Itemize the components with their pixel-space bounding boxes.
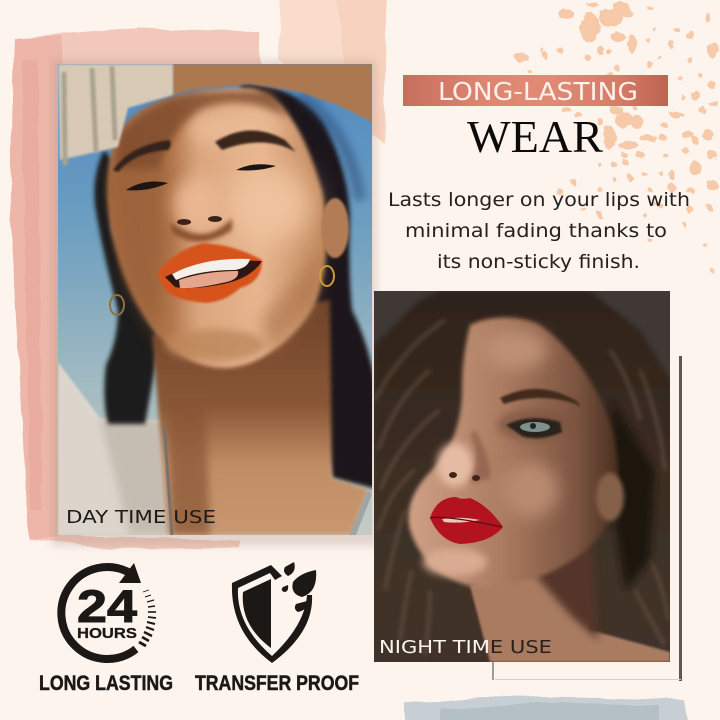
brow bbox=[500, 389, 580, 407]
teeth bbox=[172, 259, 250, 280]
description text: Lasts longer on your lips with bbox=[388, 189, 690, 211]
watercolor swatch: left pink bbox=[11, 28, 262, 549]
mouth bbox=[165, 261, 262, 288]
arrowhead bbox=[119, 563, 141, 583]
chest shadow bars bbox=[168, 400, 210, 535]
shield half fill bbox=[243, 579, 271, 648]
cheek bbox=[502, 462, 558, 518]
nostrils bbox=[449, 472, 457, 478]
sleeve fringe bbox=[64, 66, 115, 165]
heading: wear: WEAR bbox=[467, 111, 603, 162]
ear and earring bbox=[321, 198, 349, 258]
small drop bbox=[284, 562, 295, 576]
large drop bbox=[292, 570, 316, 597]
label: night time use: NIGHT TIM E USE bbox=[379, 637, 552, 658]
lip highlight bbox=[442, 518, 480, 523]
chest and neck bbox=[469, 574, 670, 662]
icon: shield with drops bbox=[232, 562, 316, 663]
label: transfer proof: TRANSFER PROOF bbox=[195, 672, 359, 695]
number 24: 24 bbox=[77, 581, 137, 632]
label: day time use: DAY TIME USE bbox=[66, 507, 216, 528]
backdrop bbox=[374, 291, 670, 662]
forehead glow bbox=[483, 330, 547, 370]
neck shadow bbox=[535, 540, 598, 640]
face bbox=[107, 88, 327, 368]
hair bbox=[94, 84, 380, 490]
eyes bbox=[126, 182, 168, 190]
eye bbox=[506, 418, 562, 438]
nose bbox=[174, 177, 222, 233]
tiny drop bbox=[282, 585, 288, 592]
hours text: HOURS bbox=[77, 625, 137, 642]
arm across forehead bbox=[172, 64, 372, 122]
right hair shadow bbox=[612, 400, 655, 590]
forehead shadow bbox=[115, 90, 290, 170]
paint splatter bbox=[515, 1, 719, 272]
sleeve bbox=[58, 64, 173, 160]
brows bbox=[113, 140, 171, 172]
description text: its non-sticky finish. bbox=[437, 251, 640, 273]
decorative rule: bottom horizontal bbox=[495, 679, 681, 680]
shirt bbox=[58, 362, 178, 535]
chin glow bbox=[423, 548, 487, 576]
label: long lasting: LONG LASTING bbox=[39, 672, 173, 695]
forehead highlight bbox=[190, 114, 280, 146]
description text bbox=[388, 189, 690, 273]
sky bbox=[58, 64, 372, 535]
lips: orange bbox=[157, 243, 262, 303]
tick marks bbox=[139, 590, 156, 646]
description text: minimal fading thanks to bbox=[405, 220, 667, 242]
icon: 24 hours clock bbox=[61, 563, 156, 659]
hair strands bbox=[375, 320, 668, 655]
shirt shadow bbox=[100, 420, 175, 535]
strap bbox=[349, 490, 372, 535]
blue hair wisps bbox=[300, 95, 360, 200]
zipper bbox=[164, 422, 172, 535]
hair bbox=[374, 291, 680, 670]
ear bbox=[596, 473, 624, 521]
photo shadow bbox=[52, 60, 376, 546]
face bbox=[408, 318, 618, 587]
watercolor swatch: top peach bbox=[279, 0, 386, 145]
chest and neck bbox=[152, 300, 368, 535]
photo: night time use bbox=[374, 291, 680, 670]
chin shade bbox=[165, 329, 265, 361]
photo: day time use bbox=[58, 64, 380, 535]
nose shade bbox=[470, 430, 490, 484]
decorative rule: below night photo bbox=[492, 662, 494, 680]
tongue bbox=[179, 271, 238, 288]
cheek highlight bbox=[228, 167, 312, 243]
banner: long-lasting bbox=[403, 75, 668, 106]
lips: red bbox=[430, 497, 503, 544]
lower drop bbox=[295, 601, 307, 612]
left face shadow bbox=[110, 165, 168, 345]
right jaw shade bbox=[260, 250, 322, 355]
banner text: LONG-LASTING bbox=[438, 77, 638, 106]
lip parting bbox=[430, 517, 502, 527]
eye socket shadow bbox=[495, 408, 556, 442]
watercolor swatch: bottom grey bbox=[405, 696, 688, 720]
decorative rule: right vertical bbox=[679, 356, 682, 681]
nose highlight bbox=[437, 443, 473, 487]
